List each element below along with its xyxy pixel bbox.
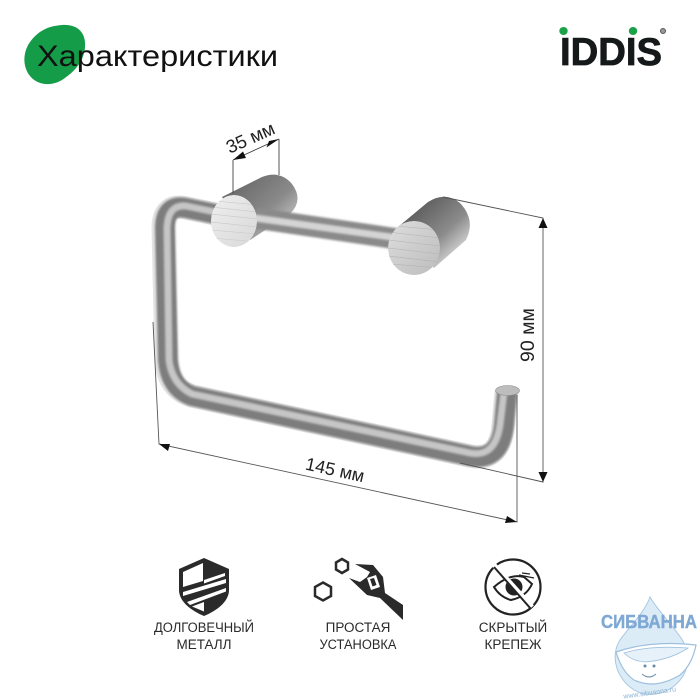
upper bar bbox=[255, 218, 398, 239]
dimension: 145 mm bbox=[153, 322, 517, 523]
bracket left cylinder bbox=[222, 175, 298, 240]
tube end cap bbox=[496, 386, 520, 396]
dimension: 90 mm bbox=[443, 197, 548, 482]
product: towel ring holder bbox=[163, 175, 520, 457]
bracket right cylinder bbox=[398, 197, 470, 268]
bracket left disc bbox=[210, 195, 258, 247]
logo: Sibvanna watermark bbox=[601, 597, 697, 700]
label: durable metal: ДОЛГОВЕЧНЫЙ bbox=[154, 620, 254, 635]
icon: shield bbox=[179, 558, 229, 616]
label: durable metal: МЕТАЛЛ bbox=[176, 637, 232, 652]
label: hidden fastening: КРЕПЕЖ bbox=[484, 637, 542, 652]
bracket right disc bbox=[388, 221, 440, 275]
lower and side tube bbox=[163, 206, 507, 457]
label: hidden fastening: СКРЫТЫЙ bbox=[479, 620, 547, 635]
dimension: 145 mm: 145 мм bbox=[304, 454, 366, 486]
dimension: 35 mm bbox=[223, 118, 279, 193]
title: Характеристики bbox=[37, 40, 278, 73]
label: easy installation: УСТАНОВКА bbox=[320, 637, 396, 652]
green blob bbox=[24, 25, 85, 84]
icon: wrench and nuts bbox=[315, 559, 403, 620]
dimension: 35 mm: 35 мм bbox=[223, 118, 278, 158]
dimension: 90 mm: 90 мм bbox=[517, 308, 539, 362]
label: easy installation: ПРОСТАЯ bbox=[326, 620, 390, 635]
icon: hidden eye bbox=[486, 560, 540, 614]
logo: IDDIS: IDDIS bbox=[560, 31, 662, 74]
